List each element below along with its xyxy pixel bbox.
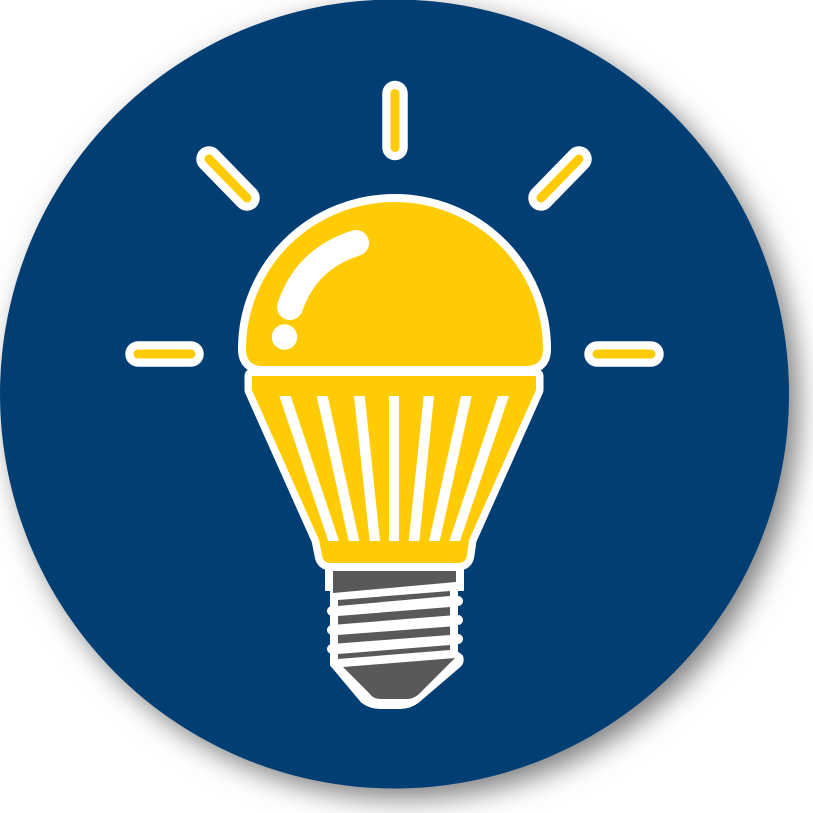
dome highlight dot xyxy=(272,324,297,350)
bulb dome xyxy=(246,202,543,366)
ray: upper right xyxy=(541,159,579,198)
ray: upper left xyxy=(209,159,247,198)
ray: left xyxy=(138,341,191,367)
heat sink fins xyxy=(279,396,509,541)
ray: right xyxy=(597,341,651,367)
light rays xyxy=(138,94,651,354)
light bulb xyxy=(246,202,543,708)
ray: top xyxy=(382,94,408,148)
bulb screw base xyxy=(326,565,463,708)
bulb heat sink body xyxy=(252,376,536,563)
dome highlight arc xyxy=(290,243,356,307)
